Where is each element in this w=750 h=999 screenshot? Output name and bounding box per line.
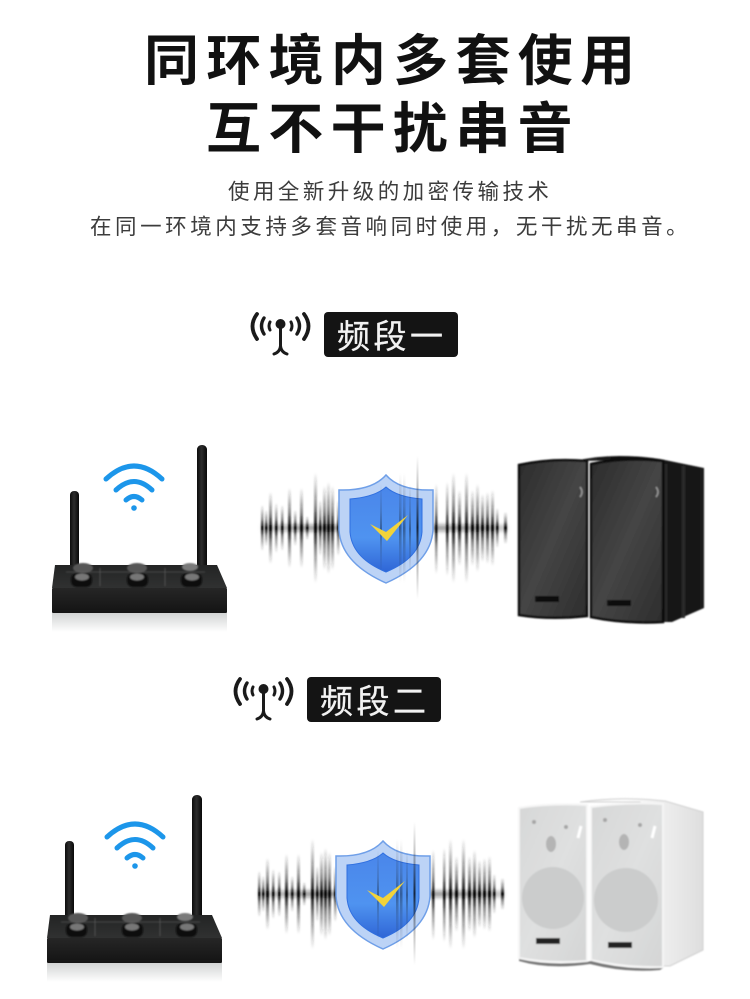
icon: wifi one xyxy=(106,466,162,511)
label: band two: 频段二 xyxy=(320,683,430,720)
check mark xyxy=(367,881,405,907)
check mark xyxy=(370,515,408,541)
white speakers xyxy=(519,799,703,971)
title: 同环境内多套使用 xyxy=(144,30,642,92)
black speakers xyxy=(519,456,704,622)
reflection xyxy=(47,963,222,982)
subtitle text xyxy=(90,180,691,239)
transmitter two xyxy=(47,795,222,982)
label: band one: 频段一 xyxy=(337,318,446,355)
icon: antenna band two xyxy=(236,679,292,719)
icon: shield two xyxy=(336,822,430,965)
sound wave one xyxy=(261,473,507,583)
icon: shield one xyxy=(339,456,433,599)
subtitle text: 使用全新升级的加密传输技术 xyxy=(228,180,552,204)
icon: antenna band one xyxy=(252,314,308,354)
subtitle text: 在同一环境内支持多套音响同时使用，无干扰无串音。 xyxy=(90,215,691,239)
title xyxy=(144,30,642,160)
title: 互不干扰串音 xyxy=(206,98,580,160)
transmitter one xyxy=(52,445,227,632)
icon: wifi two xyxy=(107,824,163,869)
sound wave two xyxy=(258,839,504,949)
label: band two xyxy=(307,677,441,722)
reflection xyxy=(52,613,227,632)
label: band one xyxy=(324,312,458,357)
